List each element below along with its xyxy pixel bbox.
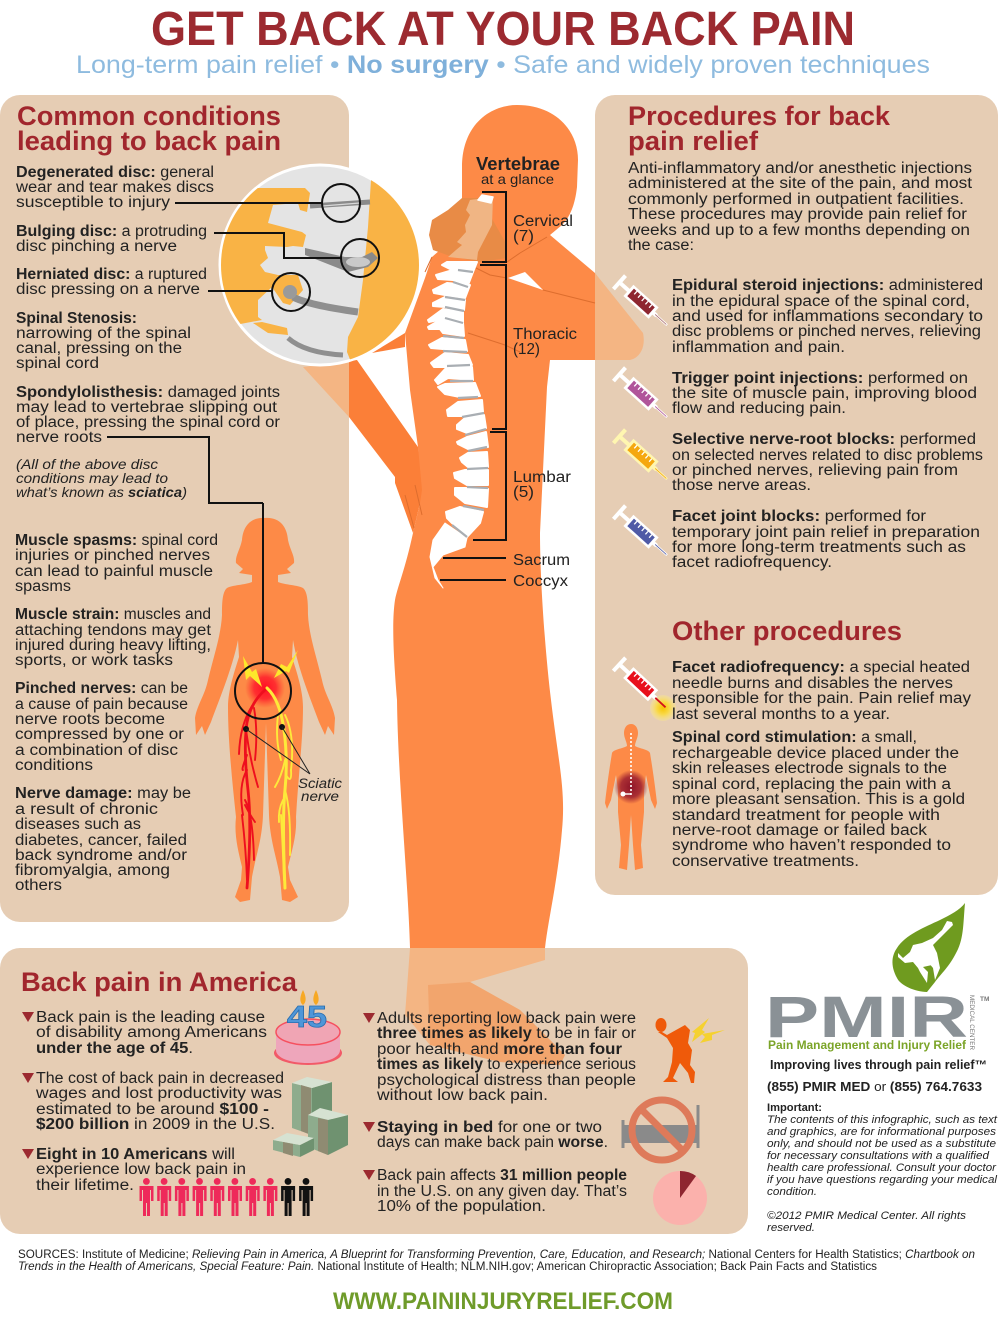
- text block: spinal cord stimulation: rechargeable device placed under the: [672, 745, 959, 762]
- text block: nerve-root blocks: [672, 431, 983, 494]
- text block: nerve-root blocks: or pinched nerves, relieving pain from: [672, 462, 958, 479]
- heading: procedures: Procedures for back: [628, 101, 891, 131]
- text block: procedures intro: These procedures may provide pain relief for: [628, 206, 967, 223]
- red nerve: [239, 690, 265, 888]
- text block: adults reporting: times as likely to experience serious: [377, 1056, 636, 1073]
- tagline and phone: [767, 1058, 987, 1094]
- text block: nerve and muscle conditions: a cause of pain because: [15, 696, 188, 713]
- text block: 31 million: Back pain affects 31 million people: [377, 1167, 627, 1184]
- label: sciatic nerve: nerve: [301, 789, 339, 804]
- text block: cost: wages and lost productivity was: [35, 1085, 282, 1102]
- vertebrae labels: Cervical: [513, 213, 573, 230]
- label: sciatic nerve: Sciatic: [298, 776, 342, 791]
- icon: syringe purple: [612, 366, 673, 424]
- bullet triangles: [22, 1012, 375, 1180]
- text block: nerve and muscle conditions: attaching tendons may get: [15, 622, 212, 639]
- disclaimer: if you have questions regarding your medical: [767, 1174, 998, 1186]
- text block: epidural: Epidural steroid injections: administered: [672, 277, 983, 294]
- text block: nerve and muscle conditions: can lead to painful muscle: [15, 563, 213, 580]
- vertebrae labels: (7): [513, 228, 534, 245]
- text block: facet joint blocks: facet radiofrequency.: [672, 554, 832, 571]
- text block: spinal cord stimulation: standard treatment for people with: [672, 807, 940, 824]
- text block: nerve and muscle conditions: injuries or pinched nerves: [15, 547, 210, 564]
- text block: epidural: and used for inflammations secondary to: [672, 308, 983, 325]
- pain glow: [245, 668, 285, 708]
- text block: nerve and muscle conditions: Nerve damage: may be: [15, 785, 191, 802]
- text block: facet joint blocks: for more long-term treatments such as: [672, 539, 966, 556]
- text block: 31 million: [377, 1167, 627, 1215]
- vertebrae labels: Vertebrae: [476, 154, 560, 174]
- text block: facet joint blocks: Facet joint blocks: performed for: [672, 508, 926, 525]
- text block: nerve and muscle conditions: Pinched nerves: can be: [15, 680, 188, 697]
- chart: pie 10 percent: [653, 1171, 707, 1225]
- subtitle: Long-term pain relief • No surgery • Safe and widely proven techniques: [76, 51, 930, 79]
- text block: facet radiofrequency: Facet radiofrequency: a special heated: [672, 659, 970, 676]
- text block: spinal cord stimulation: [672, 729, 965, 870]
- heading: common conditions: leading to back pain: [17, 126, 281, 156]
- heading: back pain in America: Back pain in America: [21, 967, 298, 997]
- text block: staying in bed: Staying in bed for one or two: [377, 1119, 602, 1136]
- text block: procedures intro: [627, 160, 973, 254]
- text block: 31 million: 10% of the population.: [377, 1198, 546, 1215]
- heading: procedures: pain relief: [628, 126, 759, 156]
- text block: epidural: disc problems or pinched nerves, relieving: [672, 323, 981, 340]
- text block: disc conditions: Herniated disc: a ruptured: [16, 266, 207, 283]
- connector lines from conditions to illustrations: [107, 203, 342, 503]
- icon: hand on neck: [429, 198, 507, 262]
- icon: money stacks: [273, 1077, 348, 1157]
- bracket lines for spine regions: [440, 192, 506, 580]
- text block: disc conditions: of place, pressing the spinal cord or: [16, 414, 280, 431]
- text block: nerve and muscle conditions: Muscle spasms: spinal cord: [15, 532, 218, 549]
- icon: person with back pain: [656, 1018, 725, 1083]
- text block: eight in ten: their lifetime.: [36, 1177, 134, 1194]
- thoracic and lumbar vertebrae: [428, 262, 488, 537]
- text block: disc conditions: Spinal Stenosis:: [16, 310, 137, 327]
- text block: trigger point: Trigger point injections: performed on: [672, 370, 968, 387]
- text block: spinal cord stimulation: nerve-root damage or failed back: [672, 822, 927, 839]
- disclaimer: reserved.: [767, 1222, 815, 1234]
- icon: syringe maroon: [612, 274, 673, 332]
- logo: PMIR: TM: [980, 996, 989, 1003]
- text block: nerve-root blocks: Selective nerve-root blocks: performed: [672, 431, 976, 448]
- spine illustration: [405, 195, 595, 588]
- text block: adults reporting: psychological distress than people: [377, 1072, 636, 1089]
- icon: birthday cake 45: 45: [287, 999, 327, 1034]
- text block: nerve and muscle conditions: Muscle strain: muscles and: [15, 606, 211, 623]
- heading: common conditions: Common conditions: [17, 101, 281, 131]
- text block: facet radiofrequency: [672, 659, 971, 723]
- disclaimer: and graphics, are for informational purposes: [767, 1126, 997, 1138]
- text block: nerve and muscle conditions: a combination of disc: [15, 742, 178, 759]
- vertebrae labels: at a glance: [481, 171, 554, 187]
- figure: sciatic nerve body: [195, 503, 335, 902]
- text block: adults reporting: [376, 1010, 636, 1104]
- text block: epidural: [672, 277, 983, 356]
- logo: PMIR: MEDICAL CENTER: [968, 995, 974, 1051]
- text block: disc conditions: Spondylolisthesis: damaged joints: [16, 384, 280, 401]
- text block: procedures intro: Anti-inflammatory and/or anesthetic injections: [628, 160, 972, 177]
- logo: PMIR: [765, 903, 989, 1052]
- text block: nerve and muscle conditions: back syndrome and/or: [15, 847, 187, 864]
- text block: facet radiofrequency: responsible for the pain. Pain relief may: [672, 690, 971, 707]
- text block: staying in bed: [377, 1119, 608, 1151]
- sources: Trends in the Health of Americans, Special Feature: Pain. National Institute of Health; NLM.NIH.gov; American Chiropractic Association; Back Pain Facts and Statistics: [18, 1261, 877, 1273]
- text block: disc conditions: disc pinching a nerve: [16, 238, 177, 255]
- text block: procedures intro: weeks and up to a few months depending on: [627, 222, 970, 239]
- title: GET BACK AT YOUR BACK PAIN: [151, 3, 855, 56]
- icon: no bed: [623, 1100, 698, 1160]
- text block: spinal cord stimulation: syndrome who haven’t responded to: [672, 837, 951, 854]
- heading: procedures: [628, 101, 891, 156]
- disclaimer: only, and should not be used as a substitute: [767, 1138, 996, 1150]
- icon: syringe blue: [612, 504, 673, 562]
- text block: nerve and muscle conditions: conditions: [15, 757, 93, 774]
- text block: disc conditions: disc pressing on a nerve: [16, 281, 200, 298]
- text block: disc conditions: susceptible to injury: [16, 194, 170, 211]
- text block: nerve-root blocks: on selected nerves related to disc problems: [672, 447, 983, 464]
- text block: adults reporting: three times as likely to be in fair or: [377, 1025, 636, 1042]
- icon: spinal cord stimulator figure: [605, 724, 657, 870]
- text block: cost: $200 billion in 2009 in the U.S.: [36, 1116, 275, 1133]
- text block: spinal cord stimulation: skin releases electrode signals to the: [672, 760, 947, 777]
- heading: other procedures: Other procedures: [672, 616, 902, 646]
- text block: cost: [35, 1070, 284, 1133]
- text block: leading cause: under the age of 45 .: [36, 1040, 193, 1057]
- vertebrae labels: (12): [513, 341, 540, 358]
- icon row: people 8 of 10: [140, 1178, 313, 1216]
- vertebrae labels: Thoracic: [513, 326, 577, 343]
- icon: birthday cake 45: [274, 990, 342, 1065]
- text block: epidural: inflammation and pain.: [672, 339, 845, 356]
- text block: facet joint blocks: temporary joint pain relief in preparation: [672, 524, 980, 541]
- text block: nerve and muscle conditions: a result of chronic: [15, 801, 158, 818]
- text block: procedures intro: administered at the site of the pain, and most: [628, 175, 973, 192]
- text block: leading cause: Back pain is the leading cause: [36, 1009, 265, 1026]
- text block: disc conditions: wear and tear makes discs: [15, 179, 214, 196]
- text block: nerve and muscle conditions: fibromyalgia, among: [15, 862, 170, 879]
- text block: nerve and muscle conditions: diseases such as: [15, 816, 141, 833]
- text block: spinal cord stimulation: more pleasant sensation. This is a gold: [672, 791, 965, 808]
- text block: 31 million: in the U.S. on any given day. That’s: [377, 1183, 627, 1200]
- text block: epidural: in the epidural space of the spinal cord,: [672, 293, 970, 310]
- text block: facet radiofrequency: last several months to a year.: [672, 706, 890, 723]
- yellow nerve: [267, 688, 292, 888]
- vertebrae labels: Coccyx: [513, 573, 568, 590]
- disclaimer: condition.: [767, 1186, 817, 1198]
- text block: eight in ten: [36, 1146, 246, 1194]
- text block: eight in ten: Eight in 10 Americans will: [36, 1146, 235, 1163]
- text block: nerve and muscle conditions: compressed by one or: [15, 726, 184, 743]
- text block: eight in ten: experience low back pain in: [36, 1161, 246, 1178]
- text block: disc conditions: Degenerated disc: general: [16, 164, 214, 181]
- disclaimer: health care professional. Consult your doctor: [767, 1162, 997, 1174]
- text block: trigger point: the site of muscle pain, improving blood: [672, 385, 977, 402]
- figure: standing body with spine, dark layer: [303, 105, 644, 1065]
- spinal discs: [443, 270, 488, 537]
- text block: trigger point: [672, 370, 977, 417]
- tagline and phone: (855) PMIR MED or (855) 764.7633: [767, 1079, 982, 1094]
- text block: disc conditions: spinal cord: [16, 355, 99, 372]
- sources: [18, 1249, 975, 1273]
- text block: adults reporting: poor health, and more than four: [377, 1041, 622, 1058]
- text block: disc conditions: [15, 164, 280, 446]
- text block: leading cause: [36, 1009, 267, 1057]
- heading: common conditions: [17, 101, 281, 156]
- text block: nerve and muscle conditions: injured during heavy lifting,: [15, 637, 211, 654]
- text block: adults reporting: Adults reporting low back pain were: [377, 1010, 636, 1027]
- note: sciatica: (All of the above disc: [16, 457, 158, 472]
- text block: nerve and muscle conditions: spasms: [15, 578, 71, 595]
- icon: syringe yellow: [612, 428, 673, 486]
- text block: spinal cord stimulation: Spinal cord stimulation: a small,: [672, 729, 917, 746]
- text block: disc conditions: narrowing of the spinal: [16, 325, 191, 342]
- icon: syringe with heated tip: [612, 656, 676, 721]
- text block: nerve and muscle conditions: diabetes, cancer, failed: [15, 832, 187, 849]
- text block: trigger point: flow and reducing pain.: [672, 400, 846, 417]
- text block: facet joint blocks: [672, 508, 980, 571]
- text block: nerve and muscle conditions: nerve roots become: [15, 711, 165, 728]
- vertebrae labels: [476, 154, 577, 590]
- icon: lightning bolts: [243, 650, 298, 687]
- text block: disc conditions: Bulging disc: a protruding: [16, 223, 207, 240]
- text block: adults reporting: without low back pain.: [376, 1087, 548, 1104]
- disclaimer: The contents of this infographic, such as text: [767, 1114, 998, 1126]
- figure: body showing through panels: [303, 273, 644, 1065]
- sacrum and coccyx: [430, 523, 467, 588]
- text block: disc conditions: nerve roots: [16, 429, 102, 446]
- disclaimer: Important:: [767, 1102, 822, 1114]
- text block: cost: estimated to be around $100 -: [36, 1101, 269, 1118]
- text block: cost: The cost of back pain in decreased: [36, 1070, 284, 1087]
- text block: procedures intro: commonly performed in outpatient facilities.: [628, 191, 964, 208]
- disclaimer: [767, 1102, 998, 1234]
- vertebrae labels: Lumbar: [513, 469, 571, 486]
- tagline and phone: Improving lives through pain relief™: [770, 1058, 987, 1072]
- logo: PMIR: Pain Management and Injury Relief: [768, 1040, 966, 1052]
- text block: staying in bed: days can make back pain worse.: [377, 1134, 608, 1151]
- text block: leading cause: of disability among Americans: [36, 1024, 267, 1041]
- vertebrae labels: Sacrum: [513, 552, 570, 569]
- cervical vertebrae: [448, 197, 493, 260]
- text block: spinal cord stimulation: conservative treatments.: [672, 853, 859, 870]
- disclaimer: for necessary consultations with a qualified: [767, 1150, 990, 1162]
- text block: disc conditions: canal, pressing on the: [16, 340, 182, 357]
- sources: SOURCES: Institute of Medicine; Relieving Pain in America, A Blueprint for Transforming Prevention, Care, Education, and Research; National Centers for Health Statistics; Chartbook on: [18, 1249, 975, 1261]
- text block: nerve and muscle conditions: sports, or work tasks: [15, 652, 173, 669]
- magnified spine circle: [218, 164, 419, 366]
- logo: PMIR: PMIR: [765, 985, 968, 1050]
- vertebrae labels: (5): [513, 484, 534, 501]
- text block: nerve and muscle conditions: [15, 532, 218, 894]
- note: sciatica: [16, 457, 187, 500]
- text block: nerve and muscle conditions: others: [15, 877, 62, 894]
- disclaimer: ©2012 PMIR Medical Center. All rights: [767, 1210, 967, 1222]
- text block: disc conditions: may lead to vertebrae slipping out: [16, 399, 278, 416]
- text block: procedures intro: the case:: [628, 237, 694, 254]
- note: sciatica: conditions may lead to: [16, 471, 169, 486]
- note: sciatica: what’s known as sciatica ): [16, 485, 187, 500]
- text block: nerve-root blocks: those nerve areas.: [672, 477, 811, 494]
- label: sciatic nerve: [298, 776, 342, 804]
- text block: spinal cord stimulation: spinal cord, replacing the pain with a: [672, 776, 951, 793]
- website url: WWW.PAININJURYRELIEF.COM: [333, 1288, 673, 1315]
- text block: facet radiofrequency: needle burns and disables the nerves: [672, 675, 953, 692]
